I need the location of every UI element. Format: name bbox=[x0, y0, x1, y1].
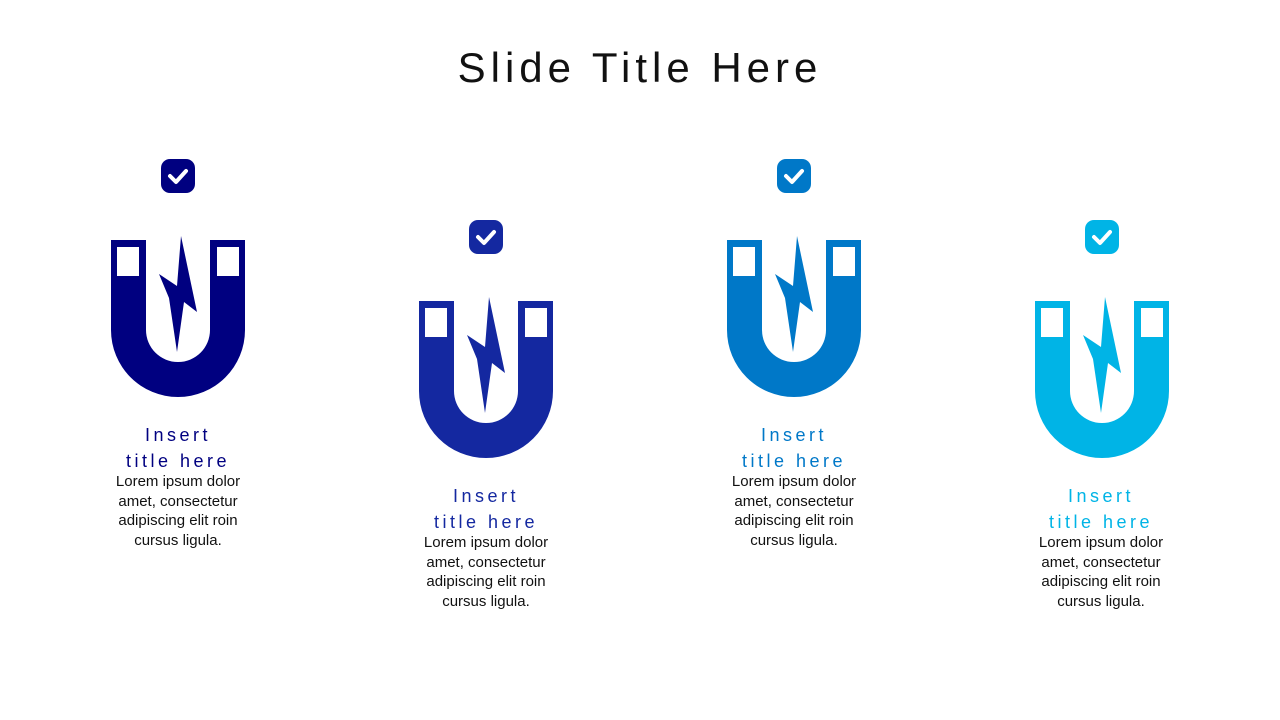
text block 1: adipiscing elit roin bbox=[118, 512, 238, 529]
text block 4: adipiscing elit roin bbox=[1041, 573, 1161, 590]
text block 4: amet, consectetur bbox=[1041, 554, 1161, 570]
text block 2: title here bbox=[434, 512, 538, 532]
text block 3: adipiscing elit roin bbox=[734, 512, 854, 529]
text block 2: cursus ligula. bbox=[442, 592, 530, 610]
text block 4: cursus ligula. bbox=[1057, 592, 1145, 610]
text block 3: Lorem ipsum dolor bbox=[732, 473, 856, 490]
text block 3: title here bbox=[742, 451, 846, 471]
text block 1: Lorem ipsum dolor bbox=[116, 473, 240, 490]
text block 3: Insert bbox=[761, 425, 827, 445]
text block 2 bbox=[424, 486, 548, 610]
icon: magnet 2 bbox=[419, 220, 553, 458]
text block 1: cursus ligula. bbox=[134, 532, 222, 548]
icon: magnet 4 bbox=[1035, 220, 1169, 458]
text block 1 bbox=[116, 425, 240, 548]
text block 3 bbox=[732, 425, 856, 548]
text block 4 bbox=[1039, 486, 1163, 610]
text block 4: title here bbox=[1049, 512, 1153, 532]
text block 1: title here bbox=[126, 451, 230, 471]
text block 1: Insert bbox=[145, 425, 211, 445]
text block 2: amet, consectetur bbox=[426, 554, 546, 570]
text block 3: cursus ligula. bbox=[750, 532, 838, 548]
icon: magnet 3 bbox=[727, 159, 861, 397]
text block 3: amet, consectetur bbox=[734, 492, 854, 510]
text block 2: Lorem ipsum dolor bbox=[424, 534, 548, 551]
icon: magnet 1 bbox=[111, 159, 245, 397]
text block 2: Insert bbox=[453, 486, 519, 506]
title: Slide Title Here bbox=[458, 44, 822, 91]
text block 2: adipiscing elit roin bbox=[426, 573, 546, 590]
text block 4: Lorem ipsum dolor bbox=[1039, 534, 1163, 551]
text block 1: amet, consectetur bbox=[118, 492, 238, 510]
text block 4: Insert bbox=[1068, 486, 1134, 506]
